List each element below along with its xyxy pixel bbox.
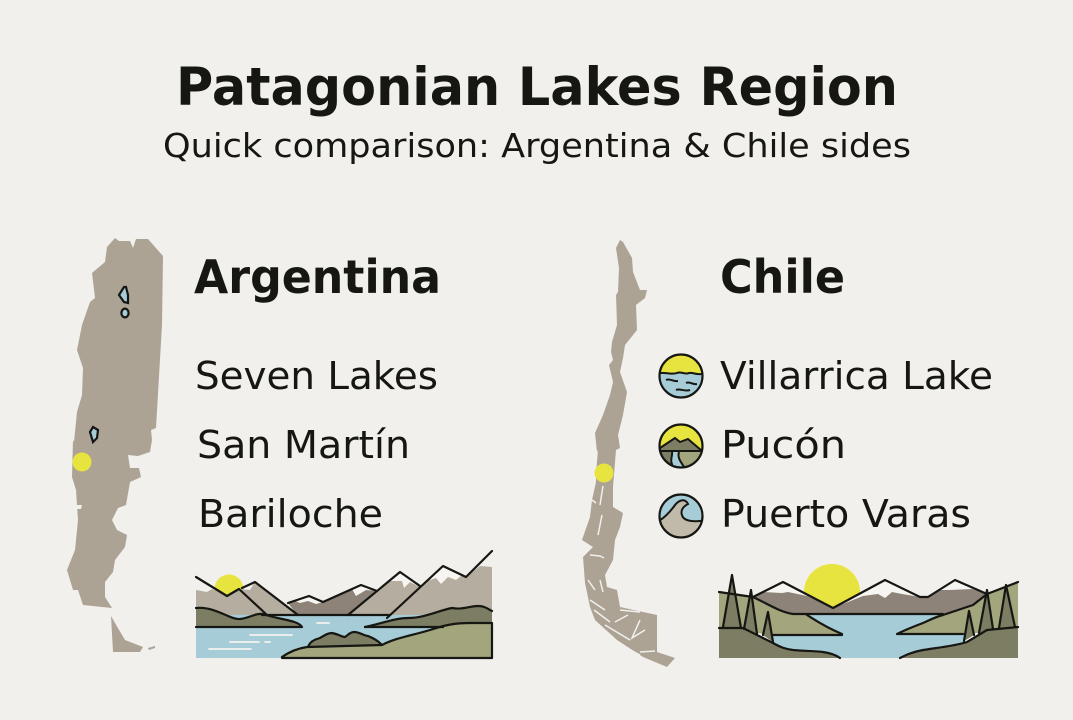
subtitle: Quick comparison: Argentina & Chile sides [163, 126, 911, 165]
icon: lake with sun [658, 353, 704, 399]
panel: Chile [582, 240, 1018, 667]
map: Chile [582, 240, 675, 667]
icon: mountain with river [658, 423, 704, 469]
label: Pucón: Pucón [721, 423, 846, 467]
lake: Argentina north upper [119, 287, 128, 303]
title: Patagonian Lakes Region [176, 57, 898, 118]
marker: Argentina sun dot [72, 452, 92, 472]
illustration: Chile landscape [719, 564, 1018, 658]
panel: Argentina [67, 238, 492, 658]
icon: wave [658, 493, 704, 539]
marker: Chile sun dot [594, 464, 614, 482]
label: Bariloche: Bariloche [198, 492, 383, 536]
label: Puerto Varas: Puerto Varas [721, 492, 971, 536]
heading: Argentina: Argentina [194, 250, 441, 304]
lake: Argentina south [90, 427, 98, 442]
label: San Martín: San Martín [197, 423, 410, 467]
map: Argentina [67, 238, 163, 652]
lake: Argentina north lower [121, 309, 129, 317]
label: Villarrica Lake: Villarrica Lake [720, 354, 993, 398]
label: Seven Lakes: Seven Lakes [195, 354, 438, 398]
illustration: Argentina landscape [196, 551, 492, 658]
heading: Chile: Chile [720, 250, 845, 304]
